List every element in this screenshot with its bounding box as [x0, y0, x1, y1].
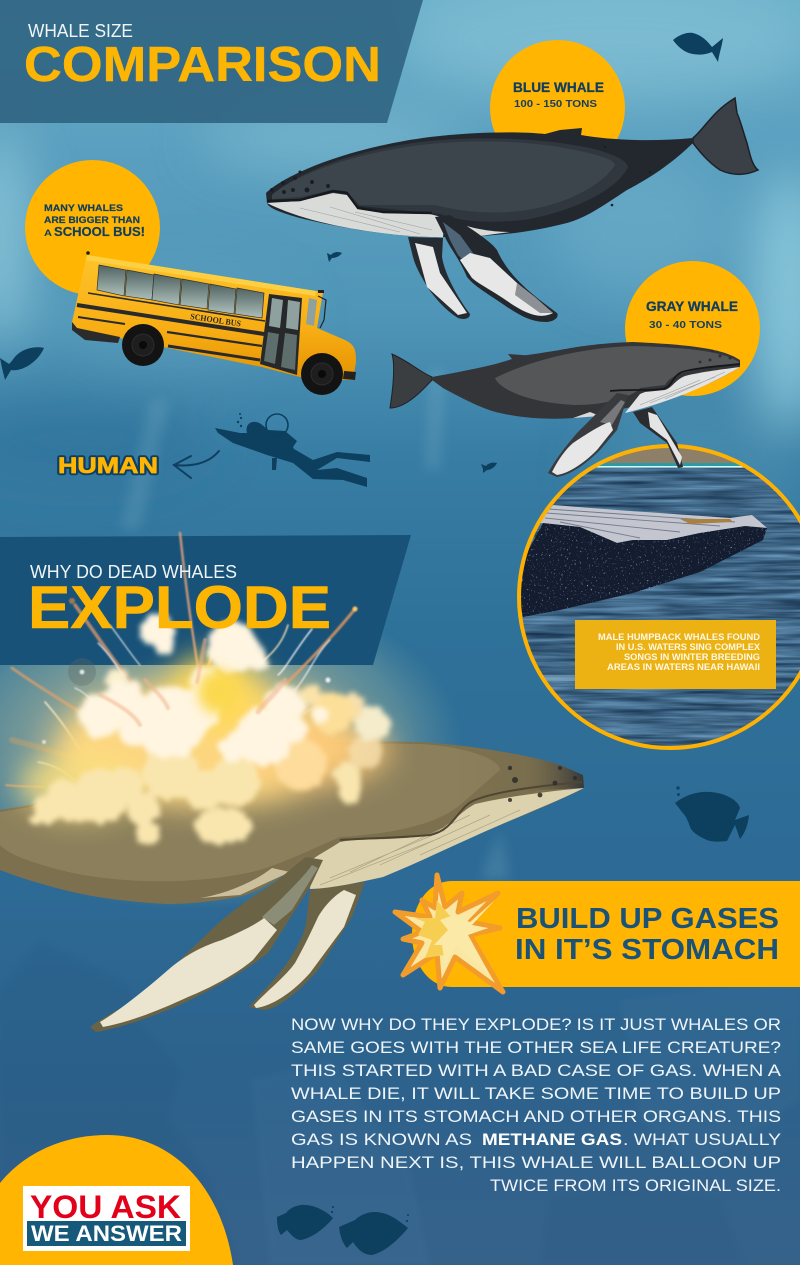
body mid tone — [272, 138, 628, 222]
tail fluke — [693, 98, 758, 174]
warm glow — [20, 655, 390, 817]
belly rear sliver — [573, 412, 600, 418]
peach flame streaks — [100, 640, 285, 725]
belly — [625, 367, 740, 413]
logo: you ask we answer: WE ANSWER — [31, 1221, 182, 1246]
human label: HUMAN — [58, 453, 158, 478]
body text: SAME GOES WITH THE OTHER SEA LIFE CREATURE? — [291, 1038, 781, 1057]
illustration: large bloated whale — [0, 742, 584, 1032]
illustration: school bus — [72, 251, 356, 395]
body text: THIS STARTED WITH A BAD CASE OF GAS. WHEN A — [291, 1061, 782, 1080]
explode heading — [28, 562, 331, 641]
mouth line — [267, 191, 432, 213]
icon: small fish near whale — [481, 463, 497, 473]
photo water texture — [515, 465, 800, 755]
icon: explosion star — [395, 875, 503, 992]
circle: gray whale label: GRAY WHALE — [646, 299, 738, 314]
body text: METHANE GAS — [482, 1130, 622, 1149]
rear flipper — [408, 237, 470, 319]
human label: HUMAN — [58, 453, 158, 478]
photo: whale underside grooves — [540, 505, 767, 543]
tubercles — [508, 766, 577, 802]
bus door — [260, 294, 302, 375]
banner shape — [0, 0, 423, 123]
banner: why do dead whales explode — [0, 535, 411, 665]
explosion streaks — [6, 533, 362, 787]
icon: scuba diver — [215, 413, 370, 487]
logo: you ask we answer: YOU ASK — [30, 1189, 181, 1225]
photo caption box: AREAS IN WATERS NEAR HAWAII — [607, 662, 760, 672]
photo caption box: SONGS IN WINTER BREEDING — [624, 652, 760, 662]
heading: comparison: COMPARISON — [24, 38, 381, 92]
icon: small fish centre — [327, 252, 342, 262]
body text — [291, 1015, 782, 1195]
rear wheel — [122, 324, 164, 366]
body inner shading — [272, 141, 615, 212]
rear flipper — [249, 882, 365, 1010]
callout text — [44, 203, 145, 239]
photo caption box — [575, 620, 776, 689]
icon: bottom fish pair — [277, 1205, 409, 1255]
front wheel — [301, 353, 343, 395]
sub heading: WHY DO DEAD WHALES — [30, 562, 237, 582]
belly — [267, 193, 445, 237]
body text: GASES IN ITS STOMACH AND OTHER ORGANS. THIS — [291, 1107, 781, 1126]
callout text: ARE BIGGER THAN — [44, 215, 140, 226]
front flipper — [435, 215, 558, 322]
callout banner: build up gases — [395, 875, 800, 992]
body inner shading — [495, 346, 739, 405]
mouth line — [610, 364, 740, 391]
icon: fish top right — [673, 33, 723, 62]
mouth line — [340, 782, 582, 840]
bus body — [72, 255, 356, 380]
circle: blue whale label — [490, 40, 625, 175]
circle: school bus callout — [25, 160, 160, 295]
front flipper — [548, 393, 628, 477]
callout banner: build up gases: IN IT’S STOMACH — [515, 934, 779, 966]
explosion background glow — [0, 580, 465, 910]
photo sky and shore — [605, 448, 735, 463]
bus roof highlight — [86, 255, 316, 296]
body text: . WHAT USUALLY — [623, 1130, 781, 1149]
photo caption box: MALE HUMPBACK WHALES FOUND — [598, 632, 761, 642]
icon: large fish — [675, 786, 749, 842]
circle: gray whale label: 30 - 40 TONS — [649, 319, 722, 331]
photo: whale dark body — [518, 523, 767, 617]
logo: you ask we answer — [23, 1186, 190, 1251]
body — [432, 342, 740, 419]
front bumper — [343, 371, 356, 380]
body inner tone — [0, 744, 500, 881]
body — [0, 742, 584, 904]
cloud puffs — [29, 669, 390, 846]
corner shape — [0, 1135, 233, 1265]
lens flares — [42, 598, 358, 744]
photo caption box: IN U.S. WATERS SING COMPLEX — [616, 642, 760, 652]
bus stripes — [77, 293, 265, 360]
photo circle: breaching humpback — [515, 440, 800, 755]
rear flipper — [633, 407, 683, 468]
body text: TWICE FROM ITS ORIGINAL SIZE. — [490, 1176, 781, 1195]
circle: gray whale label — [625, 261, 760, 396]
icon: fish left edge — [0, 347, 44, 380]
callout text: SCHOOL BUS! — [54, 225, 145, 239]
arrow to human label — [174, 451, 219, 478]
body text: NOW WHY DO THEY EXPLODE? IS IT JUST WHALES OR — [291, 1015, 781, 1034]
callout text: MANY WHALES — [44, 203, 124, 214]
lower skirt — [72, 322, 120, 343]
tubercles — [270, 146, 651, 206]
body text: HAPPEN NEXT IS, THIS WHALE WILL BALLOON UP — [291, 1153, 781, 1172]
driver window and mirror — [306, 298, 317, 326]
body — [266, 128, 693, 237]
belly rear sliver — [455, 222, 510, 236]
explosion yellow core — [198, 670, 238, 714]
callout text: A — [44, 228, 52, 239]
explosion cloud — [6, 533, 390, 846]
belly and throat grooves — [310, 788, 584, 889]
illustration: gray whale — [390, 342, 740, 477]
head shading — [420, 742, 584, 820]
illustration: blue whale — [266, 98, 758, 322]
heading: whale size: WHALE SIZE — [28, 21, 133, 41]
front flipper — [90, 857, 323, 1032]
photo ring — [519, 446, 800, 748]
body text: GAS IS KNOWN AS — [291, 1130, 472, 1149]
main heading: EXPLODE — [28, 574, 331, 641]
side windows — [97, 265, 264, 318]
callout text: BUILD UP GASES — [516, 903, 779, 935]
banner: whale size comparison — [0, 0, 423, 123]
tail fluke — [390, 354, 432, 408]
bus lettering: SCHOOL BUS — [190, 311, 242, 329]
circle: blue whale label: 100 - 150 TONS — [514, 98, 597, 110]
body text: WHALE DIE, IT WILL TAKE SOME TIME TO BUILD UP — [291, 1084, 781, 1103]
circle: blue whale label: BLUE WHALE — [513, 80, 604, 95]
